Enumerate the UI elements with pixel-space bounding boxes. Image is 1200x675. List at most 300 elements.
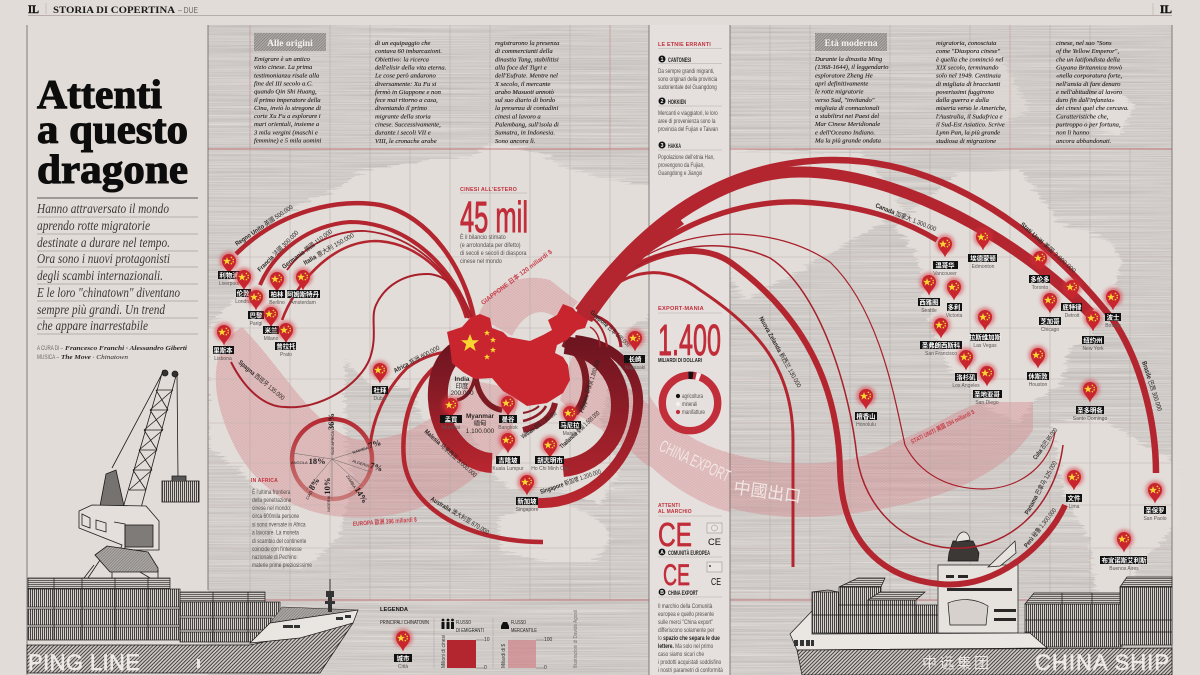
pin: Seattle: 西雅图: [919, 298, 939, 306]
pin: Chicago: Chicago: [1041, 327, 1059, 333]
text block: In Africa: IN AFRICA: [251, 478, 278, 484]
pin: Bangkok: 曼谷: [502, 414, 515, 424]
legend: PRINCIPALI CHINATOWN: [380, 620, 429, 626]
flow: Australia: [403, 356, 543, 542]
pin: Los Angeles: 洛杉矶: [956, 372, 976, 382]
standfirst: aprendo rotte migratorie: [37, 218, 150, 233]
text block: Alle origini: Emigrare è un antico: [253, 56, 311, 63]
hull lettering: China Ship: [922, 650, 1169, 675]
donut chart: [662, 375, 718, 431]
text block: Età moderna: e dell'Oceano Indiano.: [815, 129, 876, 136]
pin: Mumbai: Mumbai: [442, 425, 460, 431]
sidebar: Attenti al marchio: differiscono solamente per: [658, 627, 714, 634]
hull lettering: PING LINE: [28, 650, 140, 675]
text block: Età moderna: poverissimi fuggirono: [935, 89, 995, 96]
flow labels: 1.100.000: [466, 428, 495, 435]
flow labels: Panama 巴拿马 125.000: [1022, 459, 1059, 516]
text block: In Africa: si sono riversate in Africa: [252, 522, 306, 529]
Africa pie chart: [291, 413, 384, 512]
callout: Cinesi all'estero: CINESI ALL'ESTERO: [460, 187, 517, 193]
pin: Singapore: 新加坡: [517, 496, 537, 506]
flow: Malesia: [438, 345, 492, 463]
pin: Ho Chi Minh City: 胡志明市: [537, 456, 563, 464]
pin: Buenos Aires: 布宜诺斯艾利斯: [1102, 556, 1147, 564]
text block: Alle origini: Cina, inviò lo stregone di: [254, 105, 321, 112]
text block: Alle origini: Sumatra, in Indonesia.: [495, 130, 555, 137]
pin: San Francisco: 圣弗朗西斯科: [922, 340, 961, 350]
text block: Età moderna: Durante la dinastia Ming: [814, 56, 883, 63]
pin: Mumbai: 孟買: [445, 414, 458, 424]
flow: Regno Unito: [236, 203, 474, 318]
sidebar: Attenti al marchio: i prodotti acquistati soddisfino: [658, 659, 721, 666]
pin: Milano: 米兰: [265, 326, 278, 334]
sidebar: Le etnie erranti: Mercanti e viaggiatori, le loro: [658, 110, 718, 117]
pin: Singapore: Singapore: [516, 507, 539, 513]
pin: San Paolo: San Paolo: [1143, 516, 1167, 522]
pin: San Francisco: San Francisco: [925, 351, 957, 357]
pin: San Diego: San Diego: [975, 400, 999, 406]
pin: Lima: 文件: [1068, 494, 1081, 502]
text block: Età moderna: [814, 33, 1129, 145]
credits: [37, 345, 187, 361]
text block: Alle origini: cinese. Successivamente,: [375, 122, 441, 128]
pin: Manila: 马尼拉: [560, 420, 580, 430]
text block: Età moderna: XIX secolo, terminando: [935, 64, 999, 71]
pin: Victoria: Victoria: [946, 313, 963, 319]
icon: CE mark Europe: CE: [708, 537, 721, 548]
sidebar: Le etnie erranti: provincia del Fujian e Taiwan: [658, 126, 718, 133]
header: [28, 2, 1172, 16]
legend: chinatown pin: [394, 628, 412, 670]
flow: India: [457, 368, 475, 400]
pin: Honolulu: 檀香山: [856, 412, 876, 420]
text block: Età moderna: come "Diaspora cinese": [936, 48, 1000, 55]
text block: Età moderna: (1368-1644), il leggendario: [815, 64, 889, 71]
flow: Vietnam: [523, 403, 555, 430]
flow: Singapore: [538, 340, 638, 503]
pin: Lisbona: 里斯本: [213, 346, 233, 354]
text block: In Africa: a lavorare. La moneta: [252, 530, 299, 537]
pin: Nagasaki: Nagasaki: [625, 365, 645, 371]
flow labels: Filippine 菲律宾 1.800.000: [576, 358, 602, 414]
pin: Seattle: [918, 272, 940, 314]
middle panel background: [649, 25, 730, 675]
hull: [790, 611, 1047, 650]
callout: Cinesi all'estero: 45 mil: [460, 193, 528, 242]
sidebar: Export-mania: EXPORT-MANIA: [658, 306, 704, 312]
pin: New York: 纽约州: [1083, 336, 1103, 344]
sidebar: Export-mania: MILIARDI DI DOLLARI: [658, 358, 702, 364]
standfirst: degli scambi internazionali.: [37, 268, 163, 283]
flow: Francia: [260, 222, 470, 318]
pin: Lisbona: [213, 322, 234, 362]
text block: Età moderna: le rotte migratorie: [815, 89, 864, 96]
flow: Giappone: [590, 317, 607, 347]
flow: Filippine: [563, 343, 586, 413]
text block: In Africa: nazionale di Pechino:: [252, 554, 298, 561]
icon: CE mark China Export: CE: [663, 559, 690, 592]
donut chart: minerali: [682, 401, 697, 408]
pin: Prato: Prato: [280, 352, 292, 358]
text block: Età moderna: a stabilirsi nei Paesi del: [815, 113, 879, 120]
export flow band: Europa: [216, 327, 520, 518]
legend: trade scale: 0: [544, 665, 547, 671]
pin: Las Vegas: Las Vegas: [973, 343, 997, 349]
pin: Dubai: [370, 360, 390, 402]
flow: Spagna: [231, 274, 472, 407]
flow: Myanmar: [476, 378, 502, 410]
icon: CE mark Europe: CE: [658, 516, 692, 553]
pin: San Paolo: 圣保罗: [1145, 506, 1165, 514]
donut chart: agricoltura: [682, 393, 703, 400]
flow labels: Australia 澳大利亚 670.000: [429, 494, 491, 536]
title: Attenti: [37, 71, 162, 117]
pin: Bangkok: [498, 394, 518, 431]
text block: Alle origini: fine del III secolo a.C.: [254, 80, 313, 87]
text block: Età moderna: che un latifondista della: [1056, 56, 1121, 63]
text block: Età moderna: of the Yellow Emperor",: [1056, 48, 1119, 55]
sidebar: Attenti al marchio: i nostri parametri di conformità: [658, 667, 723, 674]
text block: Alle origini: contava 60 imbarcazioni.: [375, 48, 442, 55]
export flow band: Stati Uniti: [560, 345, 1033, 517]
credits: The Move · Chinatown: [61, 354, 129, 361]
pin: Prato: 普拉托: [276, 342, 296, 350]
sidebar: Le etnie erranti: CANTONESI: [668, 57, 691, 64]
flow: Stati Uniti: [580, 172, 1090, 313]
callout: Cinesi all'estero: cinese nel mondo: [460, 259, 502, 265]
pin: Vancouver: 温哥华: [935, 260, 955, 270]
flow labels: 200.000: [450, 390, 474, 397]
flows to Europe and Africa: [231, 203, 638, 542]
pin: Mumbai: [440, 396, 462, 431]
sidebar: Export-mania: [658, 306, 722, 431]
text block: Età moderna: l'Australia, il Sudafrica e: [936, 113, 1003, 120]
text block: Alle origini: fermò in Giappone e non: [375, 89, 442, 96]
pin: Las Vegas: [969, 308, 1002, 349]
text block: In Africa: [251, 478, 312, 569]
text block: Alle origini: diversamente: Xu Fu si: [375, 81, 437, 88]
flow: Panama: [585, 246, 1063, 548]
sidebar: Le etnie erranti: HAKKA: [668, 143, 681, 150]
sidebar: Attenti al marchio: COMUNITÀ EUROPEA: [668, 550, 710, 557]
sidebar: Le etnie erranti: Popolazione dell'etnia Han,: [658, 154, 715, 161]
text block: Età moderna: dei cinesi quel che cercava.: [1056, 105, 1129, 112]
flow labels: Vietnam 越南 1.300.000: [519, 408, 558, 441]
text block: Età moderna: nell'ansia di fare denaro: [1056, 81, 1121, 88]
sidebar: Le etnie erranti: 3: [660, 143, 664, 149]
flow labels: Nuova Zelanda 新西兰 130.000: [757, 315, 804, 389]
text block: Età moderna: Ma la più grande ondata: [814, 138, 882, 144]
text block: Alle origini: dinastia Tang, stabilitisi: [495, 56, 559, 63]
text block: Età moderna: di migliaia di braccianti: [936, 81, 1000, 88]
legend: emigrants scale: 10: [484, 637, 490, 643]
flow: Nuova Zelanda: [585, 273, 793, 567]
pin: San Francisco: [920, 316, 962, 357]
flow labels: Canada 加拿大 1.300.000: [874, 201, 938, 233]
pin: Lima: Lima: [1069, 504, 1080, 510]
Africa pie chart: CIAD 8%: [301, 476, 321, 501]
flow: fan root mass: [575, 210, 684, 322]
text block: Alle origini: mari orientali, insieme a: [254, 121, 320, 128]
sidebar: Le etnie erranti: 2: [660, 99, 664, 105]
logo IL: IL: [28, 2, 39, 16]
text block: Età moderna: cinese, nel suo "Sons: [1056, 40, 1112, 47]
standfirst: Ora sono i nuovi protagonisti: [37, 251, 170, 266]
flow labels: Thailandia 泰国 1.500.000: [557, 408, 602, 450]
pin: San Diego: [973, 364, 1002, 406]
pin: Kuala Lumpur: [492, 430, 524, 472]
pin: Victoria: 多利: [948, 302, 960, 312]
text block: Alle origini: corte Xu Fu a esplorare i: [254, 113, 321, 120]
pin: Parigi: Parigi: [250, 321, 262, 327]
pin: Santo Domingo: Santo Domingo: [1073, 416, 1107, 422]
flow: Africa: [370, 350, 460, 448]
pin: Chicago: 芝加哥: [1040, 316, 1060, 326]
sidebar: Attenti al marchio: ATTENTI: [658, 503, 681, 509]
pin: Berlino: Berlino: [269, 300, 285, 306]
pin: Liverpool: [218, 252, 240, 287]
flow: Perù: [585, 251, 1065, 584]
text block: Alle origini: dell'Eufrate. Mentre nel: [495, 73, 558, 80]
pin: Amsterdam: Amsterdam: [290, 300, 316, 306]
pin: Bangkok: Bangkok: [498, 425, 518, 431]
sidebar: Le etnie erranti: 1: [660, 57, 664, 63]
pin: Prato: [275, 320, 296, 358]
header: IL: [1160, 2, 1172, 16]
export band over panel: [649, 395, 730, 512]
sidebar: Le etnie erranti: HOKKIEN: [668, 99, 686, 106]
legend: trade scale: [493, 618, 553, 671]
text block: Alle origini: alla foce del Tigri e: [495, 64, 547, 71]
text block: Alle origini: Alle origini: [267, 39, 313, 49]
legend: emigrants scale: DI EMIGRANTI: [456, 628, 484, 634]
sidebar: Attenti al marchio: A: [660, 550, 664, 556]
pin: Toronto: 多伦多: [1030, 274, 1050, 284]
pin: Boston: 波士: [1107, 312, 1120, 322]
text block: Alle origini: 3 mila vergini (maschi e: [253, 129, 318, 136]
legend: trade scale: MERCANTILE: [511, 628, 537, 634]
map grid: [208, 25, 1172, 600]
hull: [27, 623, 353, 673]
flow labels: Italia 意大利 150.000: [302, 230, 356, 267]
map background: world map over hatched oceans: [205, 25, 1180, 675]
flow labels: Regno Unito 英國 500.000: [233, 202, 295, 248]
pin: Milano: Milano: [264, 336, 279, 342]
flow labels: 印度: [456, 381, 469, 390]
pin: Vancouver: Vancouver: [933, 271, 957, 277]
pin: Detroit: 底特律: [1062, 302, 1082, 312]
text block: Età moderna: esploratore Zheng He: [815, 72, 873, 79]
callout: Cinesi all'estero: (e arrotondata per difetto): [460, 243, 521, 249]
export flow labels: 中國出口: [732, 478, 802, 506]
text block: Età moderna: verso Sud, "invitando": [815, 97, 875, 104]
pin: Liverpool: Liverpool: [219, 281, 239, 287]
Africa pie chart: ANGOLA 18%: [291, 456, 326, 466]
flow labels: Spagna 西班牙 135.000: [237, 358, 287, 402]
pin: Nagasaki: 长崎: [629, 354, 642, 364]
text block: Età moderna: il Sud-Est Asiatico. Scrive: [936, 122, 1005, 128]
text block: Età moderna: Guyana Britannica trovò: [1056, 64, 1123, 71]
text block: Età moderna: miseria verso le Americhe,: [936, 105, 1007, 112]
text block: Età moderna: purtroppo o per fortuna,: [1055, 122, 1121, 128]
sidebar: Attenti al marchio: [658, 503, 723, 674]
text block: Alle origini: VIII, le cronache arabe: [375, 138, 437, 145]
text block: Alle origini: migrante della storia: [375, 113, 431, 120]
pin: Londra: 伦敦: [237, 288, 250, 298]
standfirst: [36, 198, 198, 334]
callout: Cinesi all'estero: [460, 187, 528, 265]
text block: Età moderna: Mar Cinese Meridionale: [814, 121, 880, 128]
text block: Età moderna: «nella corporatura forte,: [1056, 73, 1122, 80]
text block: Età moderna: non li hanno: [1056, 130, 1090, 137]
pin: Los Angeles: Los Angeles: [952, 383, 980, 389]
export flow band: Giappone: [478, 278, 578, 336]
title: [37, 71, 188, 192]
text block: Età moderna: è quella che cominciò nel: [936, 56, 1004, 63]
pin: Buenos Aires: Buenos Aires: [1109, 566, 1139, 572]
flows right fan to the Americas: [575, 160, 1156, 584]
illustration: right container ship: [790, 532, 1172, 675]
icon: CE mark China Export: CE: [711, 577, 721, 588]
pin: New York: New York: [1082, 346, 1104, 352]
superstructure: [938, 565, 1018, 633]
pin: Las Vegas: 拉斯维加斯: [969, 332, 1002, 342]
flow labels: Cuba 古巴 95.000: [1030, 426, 1060, 461]
legend: emigrants scale: [434, 618, 490, 671]
flow labels: Giappone 日本 500.000: [589, 308, 633, 349]
legend: LEGENDA: [380, 607, 408, 613]
pin: Boston: Boston: [1105, 323, 1121, 329]
text block: Età moderna: aprì definitivamente: [815, 80, 868, 87]
hull lettering: China Ship: CHINA SHIP: [1035, 650, 1169, 675]
flow labels: Perù 秘鲁 1.300.000: [1021, 506, 1058, 549]
legend: trade scale: 100: [544, 637, 553, 643]
Africa pie chart: NIGERIA 10%: [322, 478, 332, 512]
pin: Toronto: [1029, 248, 1050, 291]
export flow labels: EUROPA 歐洲 396 miliardi $: [353, 515, 417, 528]
flow labels: Malesia 马来西亚 3.000.000: [423, 428, 479, 479]
legend: [380, 607, 579, 671]
text block: In Africa: della penetrazione: [252, 497, 291, 504]
legend: emigrants scale: 0: [484, 665, 487, 671]
pin: Kuala Lumpur: 吉隆坡: [498, 456, 518, 464]
text block: Alle origini: dell'elisir della vita eterna.: [375, 64, 447, 71]
flow labels: Francia 法國 300.000: [255, 228, 301, 273]
sidebar: Attenti al marchio: lettere. Ma solo nel primo: [658, 643, 713, 650]
pin: Londra: [234, 268, 254, 305]
header: – DUE: [178, 6, 198, 15]
sidebar: Attenti al marchio: CHINA EXPORT: [668, 591, 698, 597]
pin: Parigi: [246, 288, 266, 327]
pin: San Paolo: [1143, 480, 1167, 522]
donut chart: manifatture: [682, 409, 705, 416]
pin: Edmonton: [968, 228, 997, 270]
pin: Lima: [1064, 468, 1084, 510]
mast: [325, 579, 335, 612]
text block: Alle origini: sul suo diario di bordo: [495, 97, 556, 104]
export flow labels: GIAPPONE 日本 120 miliardi $: [479, 247, 554, 307]
text block: Alle origini: di commercianti della: [495, 48, 553, 55]
pin: Ho Chi Minh City: Ho Chi Minh City: [531, 466, 569, 472]
flow: Brasile: [578, 160, 1156, 473]
Africa pie chart: NAMIBIA 7%: [351, 437, 382, 456]
pin: Edmonton: 埃德蒙顿: [970, 254, 996, 262]
pin: Berlino: [268, 270, 286, 306]
text block: Età moderna: Lynn Pan, la più grande: [935, 130, 1000, 137]
credits: A CURA DI –: [37, 346, 63, 352]
flow labels: Myanmar: [466, 413, 495, 420]
text block: Alle origini: il primo imperatore della: [254, 97, 321, 104]
sidebar: Attenti al marchio: Il marchio della Comunità: [658, 603, 713, 610]
text block: Età moderna: ancora abbandonati.: [1056, 138, 1112, 145]
sidebar: Le etnie erranti: aree di provenienza sono la: [658, 118, 716, 125]
sidebar: Attenti al marchio: B: [660, 590, 664, 596]
credits: Francesco Franchi · Alessandro Giberti: [65, 345, 187, 352]
credits: MUSICA –: [37, 355, 60, 361]
text block: Alle origini: cinesi al lavoro a: [495, 113, 541, 120]
pin: Singapore: [516, 472, 539, 513]
text block: Alle origini: vizio cinese. La prima: [254, 64, 313, 71]
export flow labels: CHINA EXPORT: [656, 436, 733, 486]
flow: Italia: [282, 241, 466, 320]
standfirst: che appare inarrestabile: [37, 318, 148, 333]
text block: Età moderna: e nell'abitudine al lavoro: [1056, 89, 1123, 96]
text block: Alle origini: la presenza di contadini: [495, 105, 558, 112]
text block: In Africa: materie prime preziosissime: [252, 562, 312, 569]
title: a questo: [37, 106, 188, 152]
pin: Boston: [1104, 288, 1122, 329]
text block: Età moderna: migratoria, conosciuta: [936, 40, 997, 47]
text block: Alle origini: quando Qin Shi Huang,: [254, 89, 317, 96]
flow labels: Stati Uniti 美国 3.000.000: [1019, 220, 1079, 275]
pin: Manila: Manila: [563, 431, 578, 437]
text block: Alle origini: femmine) e 5 mila uomini: [254, 138, 322, 144]
pin: Santo Domingo: 圣多明各: [1077, 406, 1103, 414]
text block: Età moderna: dalla guerra e dalla: [936, 97, 990, 104]
text block: Alle origini: arabo Masuoti annotò: [495, 89, 555, 96]
legend: trade scale: Miliardi di $: [501, 644, 507, 668]
text block: Età moderna: Caratteristiche che,: [1056, 113, 1109, 120]
text block: Alle origini: testimonianza risale alla: [254, 72, 320, 79]
pin: Parigi: 巴黎: [250, 310, 263, 320]
text block: Alle origini: diventando il primo: [375, 105, 428, 112]
flow: Germania: [287, 231, 468, 318]
callout: Cinesi all'estero: È il bilancio stimato: [460, 233, 506, 241]
text block: Età moderna: migliaia di connazionali: [815, 105, 880, 112]
pin: Houston: Houston: [1029, 382, 1048, 388]
text block: In Africa: di scambio del continente: [252, 538, 306, 545]
text block: Alle origini: Sono ancora lì.: [495, 138, 536, 145]
text block: In Africa: circa 600mila persone: [252, 513, 299, 520]
legend: chinatown pin: 城市: [397, 654, 410, 662]
pin: Chicago: [1039, 290, 1061, 333]
pin: Nagasaki: [624, 328, 645, 371]
sidebar: Attenti al marchio: lo spazio che separa le due: [658, 635, 720, 642]
legend: emigrants scale: FLUSSO: [456, 620, 471, 626]
pin: Detroit: [1061, 278, 1082, 319]
pin: Victoria: [944, 278, 964, 319]
text block: Alle origini: Obiettivo: la ricerca: [375, 56, 430, 63]
sidebar: Attenti al marchio: sulle merci "China export": [658, 619, 713, 626]
containers: [28, 578, 280, 642]
pin: Amsterdam: [287, 268, 320, 306]
pin: Buenos Aires: [1100, 530, 1147, 572]
Africa pie chart: ALGERIA 7%: [351, 454, 384, 473]
sidebar: Le etnie erranti: provengono da Fujian,: [658, 162, 705, 169]
Africa pie chart: SUD AFRICA 36%: [326, 413, 336, 455]
standfirst: Hanno attraversato il mondo: [36, 201, 169, 216]
text block: In Africa: coincide con l'interesse: [252, 546, 302, 553]
